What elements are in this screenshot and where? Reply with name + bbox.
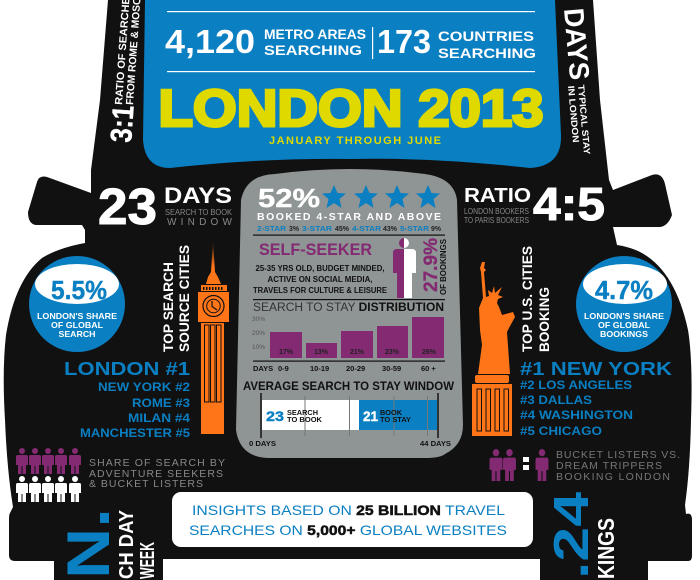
heading: top search source cities (161, 245, 192, 352)
text: share of search (89, 457, 225, 490)
top stats: 4,120 (165, 23, 255, 60)
star breakdown: 5-STAR (400, 224, 430, 233)
text: bucket listers vs dream trippers (556, 449, 680, 483)
callout: London share of global bookings: LONDON'S SHARE (584, 311, 664, 321)
heading: top US cities booking: TOP U.S. CITIES (520, 246, 535, 352)
rotated stat: search day of week (55, 508, 159, 579)
star breakdown: 3% (289, 224, 299, 233)
average search to stay window: 0 DAYS (249, 439, 276, 448)
bar chart: search to stay distribution: 20-29 (346, 364, 365, 373)
rotated stat: typical stay: TYPICAL STAY (576, 84, 592, 155)
average search to stay window: 44 DAYS (420, 439, 451, 448)
people icons: adventure seekers and bucket listers (16, 448, 81, 502)
stat: ratio 4:5 (464, 178, 605, 230)
top stats: METRO AREAS (264, 27, 366, 42)
bar chart: search to stay distribution: 60 + (421, 364, 436, 373)
list: top search cities: ROME #3 (132, 396, 190, 410)
rotated stat: 3:1 ratio (105, 0, 145, 143)
top stats (165, 11, 536, 72)
self-seeker persona: ACTIVE ON SOCIAL MEDIA, (268, 275, 372, 284)
heading: top US cities booking: BOOKING (537, 287, 552, 352)
top stats: COUNTRIES (438, 28, 534, 44)
bar chart: search to stay distribution: 10-19 (310, 364, 329, 373)
icon: Big Ben (198, 240, 229, 434)
callout: insights (172, 492, 533, 547)
stat: 23 days: WINDOW (167, 217, 233, 228)
bar chart: search to stay distribution: 10% (252, 344, 265, 351)
icon: half person (393, 238, 416, 298)
panel: center (236, 169, 463, 458)
bar chart: search to stay distribution: 26% (422, 349, 437, 356)
list: top search cities: NEW YORK #2 (98, 380, 190, 394)
rotated stat: typical stay: IN LONDON (566, 85, 581, 143)
stat: 23 days: 23 (98, 178, 157, 235)
list: top US cities (520, 358, 673, 438)
people icons: bucket listers vs dream trippers (490, 449, 548, 481)
list: top US cities: #2 LOS ANGELES (520, 378, 632, 392)
top stats: SEARCHING (438, 45, 536, 61)
star breakdown: 3-STAR (302, 224, 333, 233)
star rating: BOOKED 4-STAR AND ABOVE (257, 211, 441, 223)
average search to stay window: 21 (363, 408, 378, 424)
list: top search cities: LONDON #1 (64, 358, 190, 379)
text: bucket listers vs dream trippers: DREAM TRIPPERS (556, 460, 662, 472)
rotated stat: search day of week: CH DAY (116, 509, 138, 579)
callout: insights: INSIGHTS BASED ON 25 BILLION TRAVEL (192, 502, 505, 518)
stat: 23 days: DAYS (164, 183, 232, 208)
callout: London share of global bookings: OF GLOBAL (598, 320, 650, 330)
text: share of search: SHARE OF SEARCH BY (89, 457, 225, 469)
average search to stay window: TO BOOK (287, 415, 323, 424)
stat: 23 days: SEARCH TO BOOK (165, 207, 232, 217)
bar chart: search to stay distribution: SEARCH TO STAY DISTRIBUTION (253, 302, 444, 314)
callout: London share of global search: OF GLOBAL (51, 320, 103, 330)
callout: London share of global search: 5.5% (51, 275, 107, 305)
self-seeker persona: TRAVELS FOR CULTURE & LEISURE (253, 286, 388, 295)
windshield panel (143, 0, 561, 168)
bar chart: search to stay distribution: 21% (350, 349, 365, 356)
stat: ratio 4:5: RATIO (464, 185, 531, 207)
bar chart: search to stay distribution: DAYS (253, 364, 273, 373)
bar chart: search to stay distribution (252, 302, 445, 373)
icon: Statue of Liberty (472, 262, 515, 436)
rotated stat: search day of week: N. (55, 508, 122, 579)
average search to stay window: 23 (266, 408, 284, 424)
callout: London share of global search: SEARCH (58, 329, 96, 339)
heading: top search source cities: SOURCE CITIES (177, 245, 192, 352)
list: top search cities: MANCHESTER #5 (80, 426, 190, 440)
average search to stay window: TO STAY (380, 415, 411, 424)
callout: London share of global search: LONDON'S SHARE (37, 311, 117, 321)
bar chart: search to stay distribution: 20% (252, 330, 265, 337)
callout: London share of global search (29, 256, 125, 352)
star rating (257, 183, 441, 223)
list: top US cities: #5 CHICAGO (520, 424, 602, 438)
star breakdown: 9% (431, 224, 441, 233)
self-seeker persona (253, 238, 448, 298)
bar chart: search to stay distribution: 30-59 (382, 364, 401, 373)
stat: 23 days (98, 178, 233, 235)
star breakdown: 45% (335, 224, 349, 233)
rotated stat: 3:1 ratio: 3:1 (105, 104, 141, 143)
average search to stay window: SEARCH (287, 408, 318, 417)
top stats: SEARCHING (264, 43, 362, 58)
text: share of search: & BUCKET LISTERS (89, 478, 203, 490)
bar chart: search to stay distribution: 0-9 (278, 364, 289, 373)
star breakdown: 4-STAR (352, 224, 382, 233)
bar chart: search to stay distribution: 23% (385, 349, 400, 356)
title: JANUARY THROUGH JUNE (269, 135, 441, 147)
rotated stat: search day of week: WEEK (137, 542, 159, 579)
bar chart: search to stay distribution: 13% (314, 349, 329, 356)
self-seeker persona: 27.9% (421, 238, 442, 292)
heading: top search source cities: TOP SEARCH (161, 262, 176, 352)
star breakdown: 43% (383, 224, 397, 233)
title: LONDON 2013 (158, 80, 544, 138)
star breakdown: 2-STAR (257, 224, 287, 233)
rotated stat: bookings (545, 492, 619, 579)
callout: London share of global bookings (576, 256, 672, 352)
bar chart: search to stay distribution: 17% (279, 349, 294, 356)
self-seeker persona: OF BOOKINGS (439, 238, 448, 295)
stat: ratio 4:5: LONDON BOOKERS (464, 207, 529, 216)
rotated stat: bookings: KINGS (593, 518, 619, 579)
text: share of search: ADVENTURE SEEKERS (89, 468, 223, 480)
stat: ratio 4:5: 4:5 (533, 178, 605, 230)
average search to stay window: BOOK (380, 408, 403, 417)
rotated stat: bookings: .24 (545, 492, 599, 579)
self-seeker persona: SELF-SEEKER (259, 240, 372, 259)
top stats: 173 (377, 23, 431, 60)
list: top US cities: #4 WASHINGTON (520, 408, 633, 422)
list: top US cities: #3 DALLAS (520, 393, 592, 407)
callout: London share of global bookings: BOOKINGS (600, 329, 648, 339)
bar chart: search to stay distribution: 30% (252, 316, 265, 323)
rotated stat: typical stay: DAYS (558, 7, 595, 81)
average search to stay window: AVERAGE SEARCH TO STAY WINDOW (243, 379, 455, 393)
self-seeker persona: 25-35 YRS OLD, BUDGET MINDED, (256, 264, 384, 273)
list: top search cities (64, 358, 190, 440)
callout: insights: SEARCHES ON 5,000+ GLOBAL WEBSITES (189, 522, 507, 538)
rotated stat: typical stay (558, 7, 595, 155)
callout: London share of global bookings: 4.7% (595, 275, 653, 305)
list: top US cities: #1 NEW YORK (520, 358, 673, 379)
star breakdown (257, 224, 441, 233)
star rating: 52% (258, 183, 320, 213)
text: bucket listers vs dream trippers: BOOKING LONDON (556, 471, 670, 483)
list: top search cities: MILAN #4 (128, 411, 190, 425)
stat: ratio 4:5: TO PARIS BOOKERS (464, 216, 529, 225)
text: bucket listers vs dream trippers: BUCKET LISTERS VS. (556, 449, 680, 461)
average search to stay window (243, 379, 455, 448)
heading: top US cities booking (520, 246, 552, 352)
